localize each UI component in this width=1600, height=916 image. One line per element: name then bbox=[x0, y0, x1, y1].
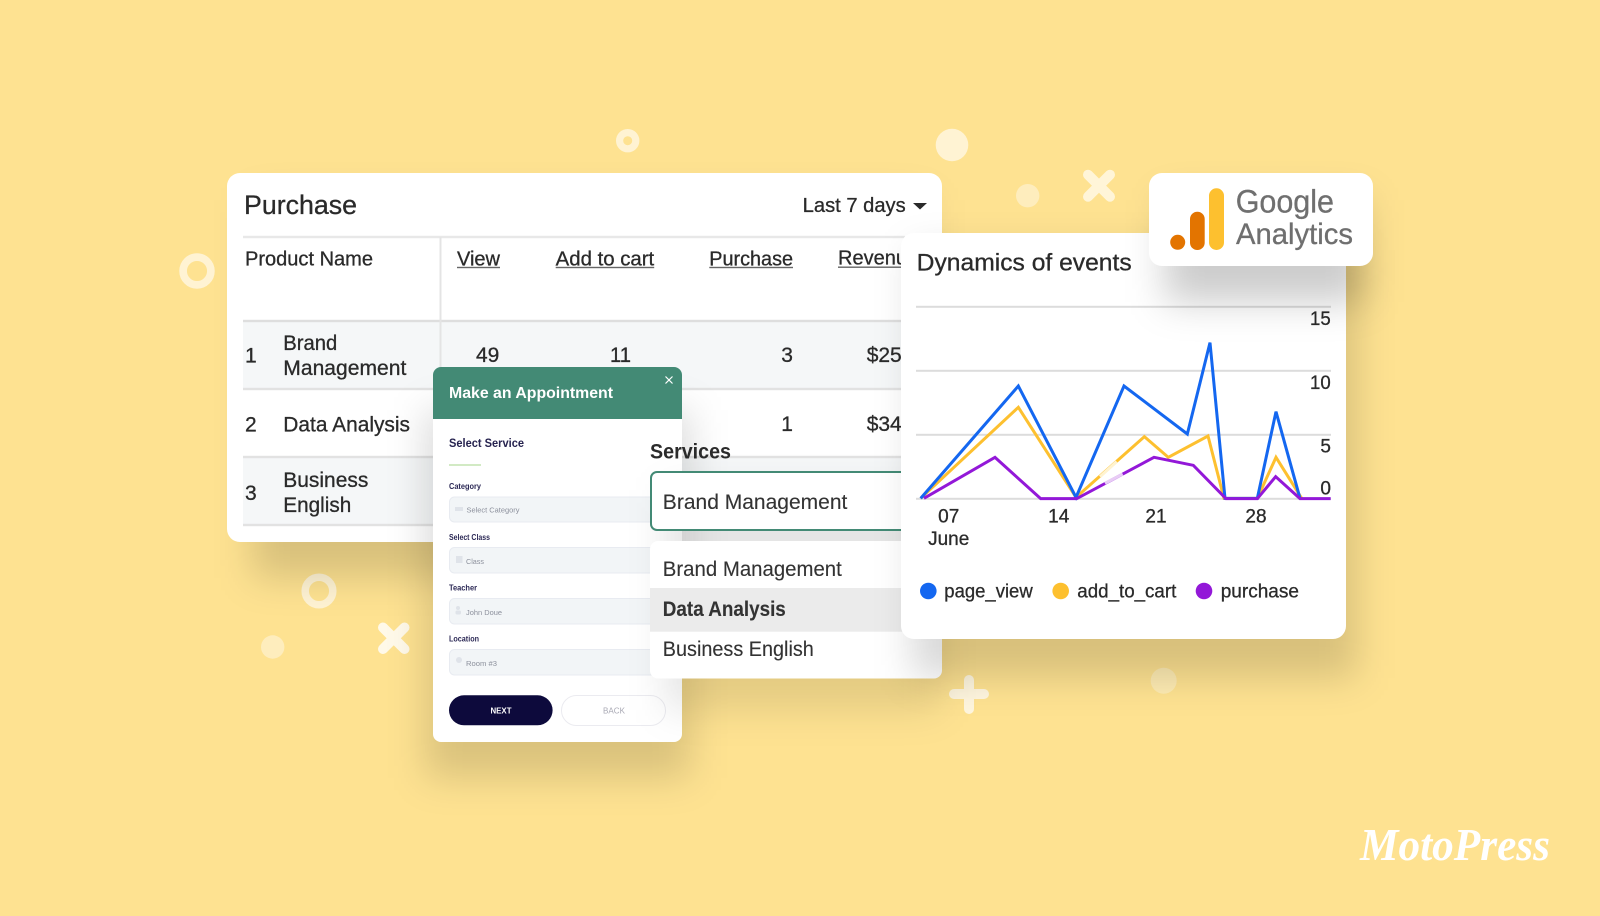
field: teacher: Teacher bbox=[449, 584, 477, 593]
panel: google analytics logo bbox=[1149, 173, 1373, 302]
field: location bbox=[449, 635, 666, 675]
chart heading: Dynamics of events bbox=[917, 250, 1132, 277]
chart legend: page_view bbox=[944, 581, 1034, 603]
x axis labels: June bbox=[928, 529, 969, 550]
panel: purchase table bbox=[227, 173, 942, 578]
heading: Purchase: Purchase bbox=[244, 190, 357, 220]
icon: analytics bars bbox=[1170, 188, 1224, 250]
field: select class: Select Class bbox=[449, 533, 490, 542]
field: select class bbox=[449, 533, 666, 573]
table row 2: Data Analysis bbox=[283, 414, 410, 437]
field: teacher: John Doue bbox=[466, 608, 502, 617]
x axis labels: 28 bbox=[1245, 507, 1267, 528]
table row 3: 3 bbox=[245, 482, 257, 505]
logo wordmark: Analytics bbox=[1236, 218, 1353, 251]
table header: Revenue bbox=[838, 248, 918, 270]
table header: Purchase bbox=[709, 248, 793, 270]
chart legend: add_to_cart bbox=[1077, 581, 1177, 603]
panel: services select bbox=[650, 441, 942, 710]
select box bbox=[651, 472, 941, 530]
dropdown list: Data Analysis bbox=[663, 598, 786, 621]
form subheading: Select Service bbox=[449, 438, 524, 450]
table rows background bbox=[243, 236, 905, 526]
button: back: BACK bbox=[603, 705, 625, 715]
table row 1: 49 bbox=[476, 344, 499, 367]
panel: make an appointment form bbox=[425, 367, 690, 778]
button: next bbox=[449, 695, 553, 725]
chart legend bbox=[920, 581, 1299, 603]
table header: Product Name bbox=[245, 248, 373, 270]
y axis labels: 15 bbox=[1310, 309, 1331, 330]
logo wordmark: Google bbox=[1236, 184, 1334, 220]
form subheading bbox=[449, 438, 524, 466]
table row 1: 11 bbox=[610, 344, 631, 367]
y axis labels: 5 bbox=[1320, 437, 1331, 458]
y axis labels bbox=[1310, 309, 1331, 499]
field: select class: Class bbox=[466, 557, 484, 566]
panel: dynamics of events chart bbox=[901, 233, 1357, 678]
field: teacher bbox=[449, 584, 666, 624]
form header bbox=[433, 367, 682, 419]
logo: MotoPress: MotoPress bbox=[1359, 819, 1550, 870]
chart legend: purchase bbox=[1221, 581, 1299, 603]
x axis labels: 14 bbox=[1048, 507, 1070, 528]
table row 2 bbox=[245, 413, 902, 437]
table row 2: 2 bbox=[245, 414, 257, 437]
table row 3: English bbox=[283, 494, 351, 517]
table row 1 bbox=[245, 332, 902, 380]
x axis labels bbox=[928, 507, 1267, 550]
dropdown list: Business English bbox=[663, 638, 814, 661]
button: next: NEXT bbox=[490, 705, 512, 715]
logo wordmark bbox=[1236, 184, 1353, 251]
x axis labels: 07 bbox=[938, 507, 959, 528]
field: category: Select Category bbox=[466, 506, 520, 515]
field: category: Category bbox=[449, 482, 481, 491]
field: category bbox=[449, 482, 666, 522]
decorative shapes bbox=[183, 129, 1177, 709]
services label: Services bbox=[650, 441, 731, 464]
table row 1: Brand bbox=[283, 332, 337, 355]
form header: Make an Appointment bbox=[449, 385, 613, 402]
select box: Brand Management bbox=[663, 491, 848, 514]
y axis labels: 10 bbox=[1310, 373, 1331, 394]
field: location: Room #3 bbox=[466, 659, 497, 668]
table row 2: $34 bbox=[867, 413, 902, 436]
x axis labels: 21 bbox=[1145, 507, 1167, 528]
y axis labels: 0 bbox=[1320, 478, 1331, 499]
table header: Add to cart bbox=[556, 248, 655, 270]
table row 1: 1 bbox=[245, 345, 257, 368]
table row 1: 3 bbox=[781, 344, 793, 367]
table row 3: Business bbox=[283, 469, 368, 492]
date range selector: Last 7 days bbox=[803, 195, 906, 217]
table row 1: Management bbox=[283, 357, 406, 380]
table header: View bbox=[457, 248, 501, 270]
button: back bbox=[562, 696, 666, 726]
dropdown list: Brand Management bbox=[663, 558, 842, 581]
field: location: Location bbox=[449, 635, 479, 644]
line chart bbox=[916, 306, 1331, 550]
table row 2: 1 bbox=[781, 413, 793, 436]
table row 3 bbox=[245, 469, 368, 517]
table header bbox=[245, 248, 918, 270]
table row 1: $25 bbox=[867, 344, 902, 367]
dropdown list bbox=[650, 541, 942, 678]
